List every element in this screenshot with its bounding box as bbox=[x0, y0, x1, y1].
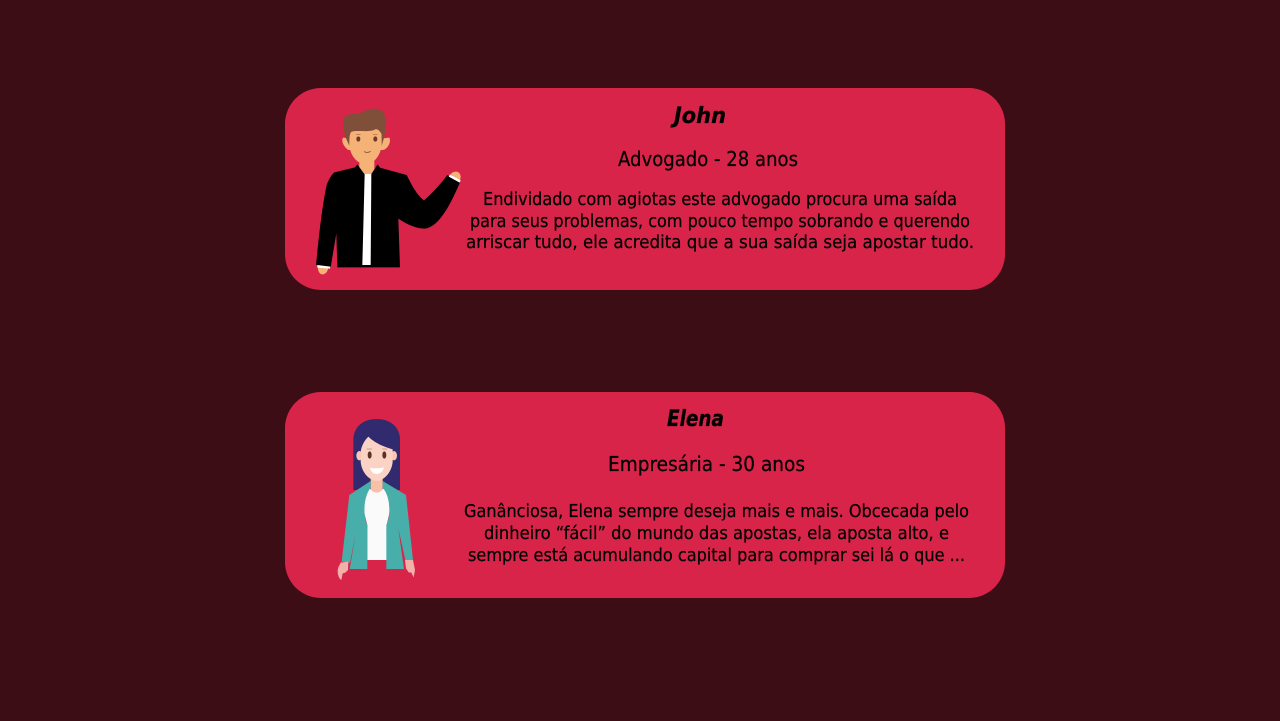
description: Elena: Ganânciosa, Elena sempre deseja mais e mais. Obcecada pelo bbox=[464, 501, 969, 522]
description: Elena: sempre está acumulando capital para comprar sei lá o que ... bbox=[468, 545, 965, 566]
description: John: arriscar tudo, ele acredita que a sua saída seja apostar tudo. bbox=[466, 232, 974, 253]
role: John: Advogado - 28 anos bbox=[618, 147, 798, 171]
description: Elena: dinheiro “fácil” do mundo das apostas, ela aposta alto, e bbox=[484, 523, 949, 544]
description: John: Endividado com agiotas este advogado procura uma saída bbox=[483, 189, 957, 210]
panel: Elena bbox=[285, 392, 1005, 598]
description: Elena bbox=[464, 501, 969, 566]
heading: Elena: Elena bbox=[667, 407, 724, 432]
icon: Elena character bbox=[338, 419, 415, 580]
heading: John: John bbox=[670, 104, 726, 129]
description: John bbox=[466, 189, 974, 253]
icon: John character bbox=[316, 109, 461, 274]
card background: Elena bbox=[285, 392, 1005, 598]
role: Elena: Empresária - 30 anos bbox=[608, 452, 805, 476]
description: John: para seus problemas, com pouco tempo sobrando e querendo bbox=[470, 211, 970, 232]
panel: John bbox=[285, 88, 1005, 290]
card background: John bbox=[285, 88, 1005, 290]
